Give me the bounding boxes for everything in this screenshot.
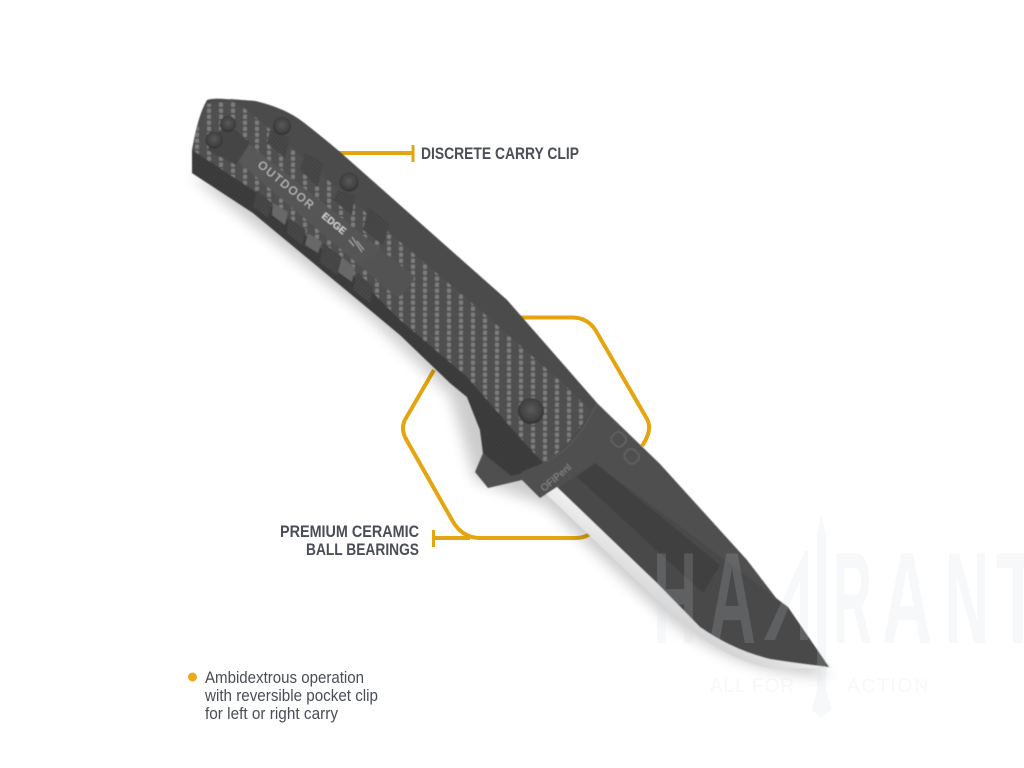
- icon: bullet: [188, 672, 197, 682]
- tang stamp: OFIPenl: [539, 462, 574, 494]
- note text: Ambidextrous operation: [205, 669, 364, 687]
- screws: [206, 116, 544, 424]
- callout line: ceramic ball bearings hexagon: [403, 318, 649, 547]
- blade cutting edge: [546, 485, 832, 669]
- clip logo text: OUTDOOR: [255, 159, 317, 213]
- pocket clip: EDGE: [319, 211, 348, 238]
- blade fuller: [577, 463, 720, 593]
- carbon windows below clip: [272, 203, 355, 282]
- grip slots below clip: [253, 190, 373, 303]
- label: discrete carry clip: DISCRETE CARRY CLIP: [421, 144, 579, 163]
- flipper shade: [483, 452, 522, 476]
- grip lower band: [192, 150, 543, 476]
- handle base: [192, 99, 597, 476]
- blade stamps: [609, 430, 641, 466]
- note text: [204, 669, 378, 723]
- watermark: ACTION: [847, 676, 928, 697]
- callout line: carry clip: [338, 145, 413, 162]
- label: premium ceramic ball bearings: BALL BEARINGS: [306, 540, 419, 559]
- feature note: [188, 669, 378, 723]
- label: premium ceramic ball bearings: [280, 522, 419, 559]
- clip logo mountains: [349, 237, 364, 252]
- label: premium ceramic ball bearings: PREMIUM CERAMIC: [280, 522, 419, 541]
- blade and tang: [475, 403, 829, 667]
- watermark: R: [833, 525, 872, 671]
- note text: for left or right carry: [205, 705, 339, 723]
- watermark: H: [653, 525, 697, 671]
- note text: with reversible pocket clip: [204, 687, 378, 705]
- watermark: [653, 513, 1024, 718]
- watermark: A: [882, 525, 932, 671]
- pocket clip: [207, 126, 414, 297]
- knife illustration: [192, 99, 832, 669]
- blade grind: [558, 463, 829, 667]
- grip slots above clip: [267, 130, 390, 245]
- knife shadow: [190, 175, 830, 676]
- watermark: A: [708, 525, 756, 671]
- watermark: ALL FOR: [710, 676, 794, 697]
- handle top band: [230, 99, 597, 410]
- carbon fibre panel: [192, 100, 592, 463]
